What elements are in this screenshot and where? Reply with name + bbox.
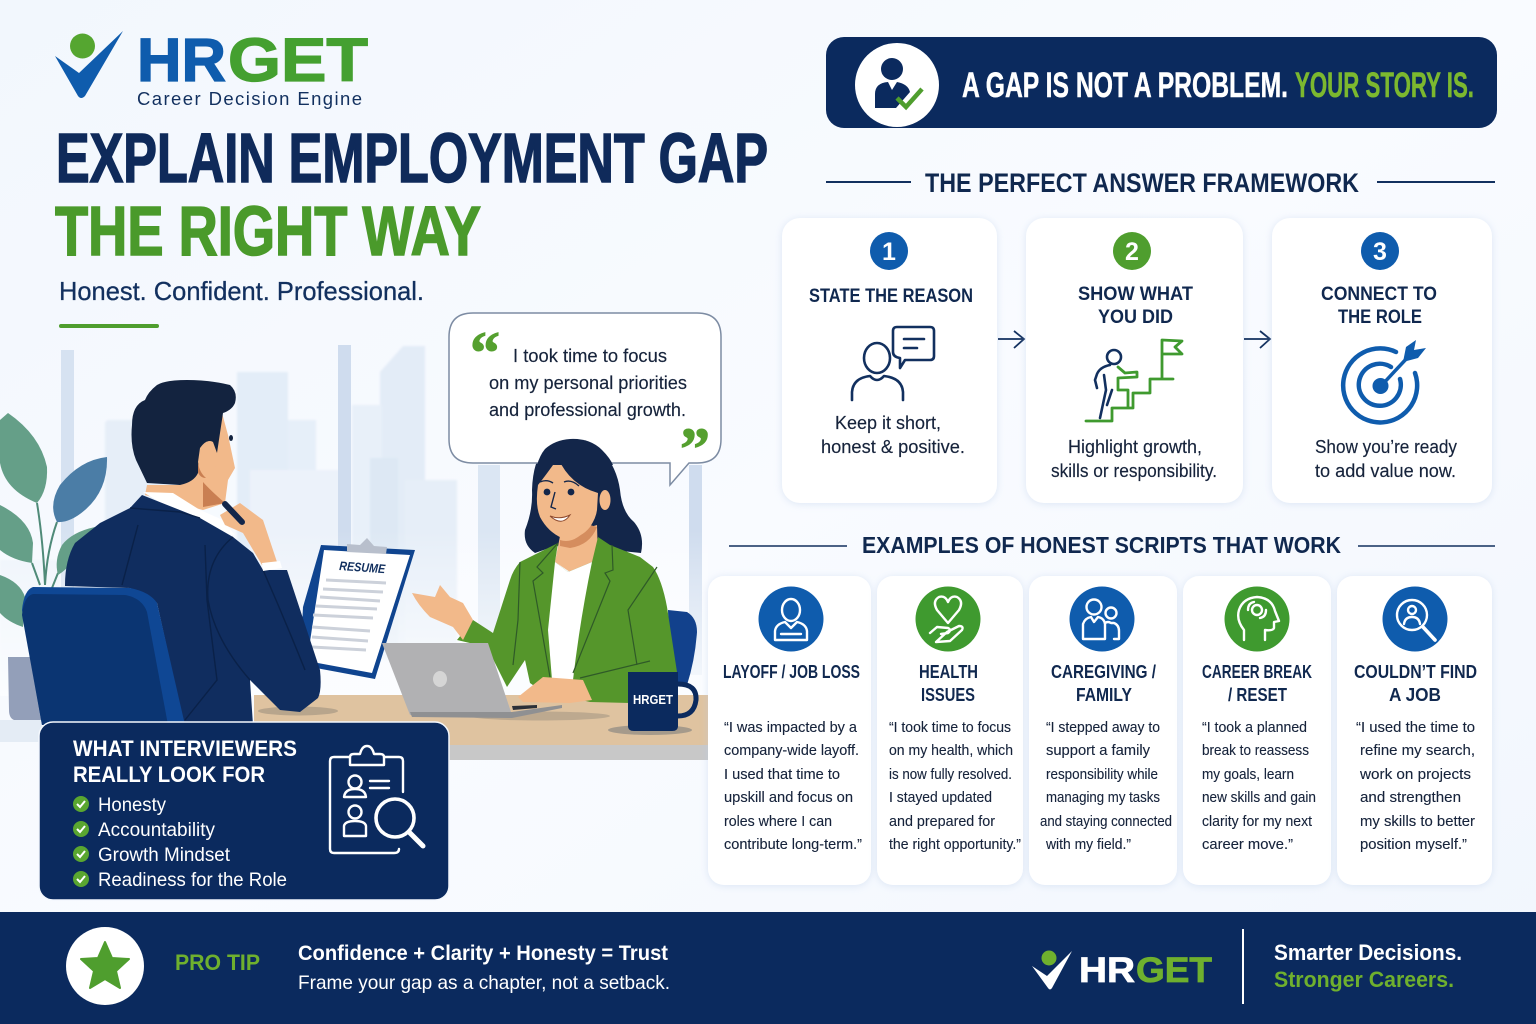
resume clipboard <box>300 538 415 679</box>
mug <box>628 672 696 731</box>
panel: couldn't find a job <box>1337 576 1492 885</box>
step 2 heading: SHOW WHAT <box>1078 284 1193 305</box>
man's chair <box>22 587 185 725</box>
card heading: FAMILY <box>1076 685 1132 705</box>
panel heading: REALLY LOOK FOR <box>73 762 265 787</box>
arrow <box>998 331 1024 348</box>
number 2: 2 <box>1125 238 1139 266</box>
quote text <box>489 346 687 420</box>
step 1 description <box>821 413 965 457</box>
script text: responsibility while <box>1046 767 1158 783</box>
title: THE RIGHT WAY <box>55 192 481 270</box>
opening quote mark: “ <box>470 320 500 386</box>
script text <box>889 720 1021 853</box>
number 2 <box>1113 232 1151 270</box>
number 1 <box>870 232 908 270</box>
icon: head with gear <box>1224 586 1290 652</box>
collar and shirt <box>143 492 235 535</box>
logo <box>55 26 368 109</box>
script text: with my field.” <box>1045 837 1131 853</box>
script text <box>1202 720 1316 853</box>
panel heading: WHAT INTERVIEWERS <box>73 736 297 761</box>
card heading <box>1051 662 1156 705</box>
green rule <box>59 324 159 328</box>
icon: star <box>66 927 144 1005</box>
panel: step 3 <box>1272 218 1492 503</box>
office skyline background <box>0 345 708 696</box>
number 1: 1 <box>882 238 896 266</box>
script text: roles where I can <box>724 814 832 830</box>
man candidate <box>65 380 321 725</box>
resume clipboard: RESUME <box>339 559 386 576</box>
number 3: 3 <box>1373 238 1387 266</box>
step 3 description: to add value now. <box>1315 461 1456 481</box>
script text: and staying connected <box>1040 814 1172 830</box>
card heading: HEALTH <box>919 662 978 682</box>
quote text: and professional growth. <box>489 400 686 420</box>
quote text: I took time to focus <box>513 346 667 366</box>
step 1 description: honest & positive. <box>821 437 965 457</box>
step 2 heading: YOU DID <box>1098 307 1173 328</box>
hand on chin <box>220 503 277 565</box>
panel: career break / reset <box>1183 576 1331 885</box>
script text: clarity for my next <box>1202 814 1312 830</box>
script text: I used that time to <box>724 767 840 783</box>
pro tip label: PRO TIP <box>175 950 260 975</box>
logo mark <box>55 31 123 98</box>
script text: “I used the time to <box>1356 720 1475 736</box>
face <box>537 458 598 538</box>
mug: HRGET <box>633 693 673 707</box>
checklist: Accountability <box>98 820 215 841</box>
footer logo <box>1032 950 1212 990</box>
card heading: ISSUES <box>921 685 975 705</box>
script text: “I stepped away to <box>1046 720 1160 736</box>
card heading: CAREGIVING / <box>1051 662 1156 682</box>
icon: clipboard with magnifier <box>330 746 423 853</box>
suit <box>65 495 321 725</box>
checklist: Readiness for the Role <box>98 870 287 891</box>
script text <box>724 720 862 853</box>
step 2 heading <box>1078 284 1193 328</box>
banner icon <box>855 43 939 127</box>
step 3 heading <box>1321 284 1437 328</box>
gesturing hand <box>412 585 473 640</box>
jacket <box>457 537 677 703</box>
banner <box>826 37 1497 128</box>
shirt cuff <box>262 561 282 571</box>
checklist <box>73 795 287 891</box>
checklist: Honesty <box>98 795 166 816</box>
script text: work on projects <box>1359 767 1471 783</box>
hair <box>525 439 642 553</box>
step 2 description: skills or responsibility. <box>1051 461 1217 481</box>
pro tip text: Confidence + Clarity + Honesty = Trust <box>298 942 668 965</box>
card heading <box>1354 662 1477 705</box>
script text: break to reassess <box>1202 743 1309 759</box>
script text <box>1356 720 1475 853</box>
script text <box>1040 720 1172 853</box>
speech bubble <box>449 313 721 485</box>
script text: is now fully resolved. <box>889 767 1012 783</box>
card heading: / RESET <box>1228 685 1287 705</box>
script text: support a family <box>1046 743 1151 759</box>
step 3 description: Show you’re ready <box>1315 437 1457 457</box>
footer slogan: Stronger Careers. <box>1274 967 1454 992</box>
heading: perfect answer framework: THE PERFECT ANSWER FRAMEWORK <box>925 168 1359 198</box>
step 3 heading: CONNECT TO <box>1321 284 1437 305</box>
script text: upskill and focus on <box>724 790 853 806</box>
script text: my skills to better <box>1360 814 1475 830</box>
script text: “I was impacted by a <box>724 720 858 736</box>
card heading <box>919 662 978 705</box>
ear <box>198 441 216 478</box>
card heading: A JOB <box>1389 685 1441 705</box>
script text: on my health, which <box>889 743 1013 759</box>
card heading <box>1202 662 1312 705</box>
logo tagline: Career Decision Engine <box>137 88 362 109</box>
shirt <box>548 562 592 680</box>
quote text: on my personal priorities <box>489 373 687 393</box>
icon: climbing stairs to flag <box>1086 340 1182 421</box>
closing quote mark: ” <box>680 416 710 482</box>
step 1 heading: STATE THE REASON <box>809 286 973 307</box>
woman's chair <box>668 610 697 685</box>
icon: heart in hand <box>916 586 980 652</box>
interview scene illustration <box>0 345 708 760</box>
checklist: Growth Mindset <box>98 845 231 866</box>
script text: company-wide layoff. <box>724 743 859 759</box>
card heading: CAREER BREAK <box>1202 662 1312 682</box>
panel: what interviewers really look for <box>39 722 449 900</box>
neck and face <box>145 413 235 510</box>
pen <box>225 504 242 522</box>
script text: contribute long-term.” <box>724 837 862 853</box>
icon: person speaking <box>852 327 934 400</box>
step 2 description: Highlight growth, <box>1068 437 1202 457</box>
footer logo: GET <box>1136 951 1212 990</box>
panel: step 1 <box>782 218 997 503</box>
step 1 description: Keep it short, <box>835 413 941 433</box>
footer slogan: Smarter Decisions. <box>1274 940 1462 965</box>
script text: my goals, learn <box>1202 767 1294 783</box>
woman interviewer <box>412 439 677 703</box>
panel: step 2 <box>1026 218 1243 503</box>
script text: I stayed updated <box>889 790 992 806</box>
banner message: A GAP IS NOT A PROBLEM. <box>962 66 1288 105</box>
icon: person <box>758 586 824 652</box>
script text: position myself.” <box>1360 837 1467 853</box>
laptop <box>382 643 592 718</box>
woman's hair over bubble <box>537 439 613 465</box>
desk <box>0 657 708 760</box>
heading: examples of honest scripts: EXAMPLES OF HONEST SCRIPTS THAT WORK <box>862 532 1341 558</box>
subtitle: Honest. Confident. Professional. <box>59 276 424 306</box>
number 3 <box>1361 232 1399 270</box>
script text: the right opportunity.” <box>889 837 1021 853</box>
card heading: LAYOFF / JOB LOSS <box>723 662 860 682</box>
logo: GET <box>228 26 368 94</box>
script text: and prepared for <box>889 814 995 830</box>
script text: new skills and gain <box>1202 790 1316 806</box>
icon: family <box>1070 586 1134 652</box>
footer band <box>0 912 1536 1024</box>
script text: career move.” <box>1202 837 1293 853</box>
panel: health issues <box>877 576 1023 885</box>
pro tip text: Frame your gap as a chapter, not a setback. <box>298 972 670 994</box>
script text: “I took time to focus <box>889 720 1011 736</box>
script text: “I took a planned <box>1202 720 1307 736</box>
hair <box>132 380 236 485</box>
step 3 description <box>1315 437 1457 481</box>
icon: target <box>1343 340 1426 422</box>
script text: managing my tasks <box>1046 790 1160 806</box>
script text: and strengthen <box>1360 790 1461 806</box>
footer slogan <box>1274 940 1462 992</box>
arrow <box>1244 331 1270 348</box>
logo wordmark: HR <box>137 26 226 94</box>
panel heading <box>73 736 297 787</box>
plant <box>0 413 107 627</box>
icon: magnifier person <box>1382 586 1448 652</box>
title <box>55 119 768 270</box>
script text: refine my search, <box>1360 743 1475 759</box>
footer logo: HR <box>1079 951 1135 990</box>
card heading: COULDN’T FIND <box>1354 662 1477 682</box>
title: EXPLAIN EMPLOYMENT GAP <box>56 119 768 197</box>
pro tip text <box>298 942 670 994</box>
panel: layoff / job loss <box>708 576 871 885</box>
step 2 description <box>1051 437 1217 481</box>
panel: caregiving / family <box>1029 576 1177 885</box>
step 3 heading: THE ROLE <box>1338 307 1422 328</box>
neck <box>555 525 598 572</box>
